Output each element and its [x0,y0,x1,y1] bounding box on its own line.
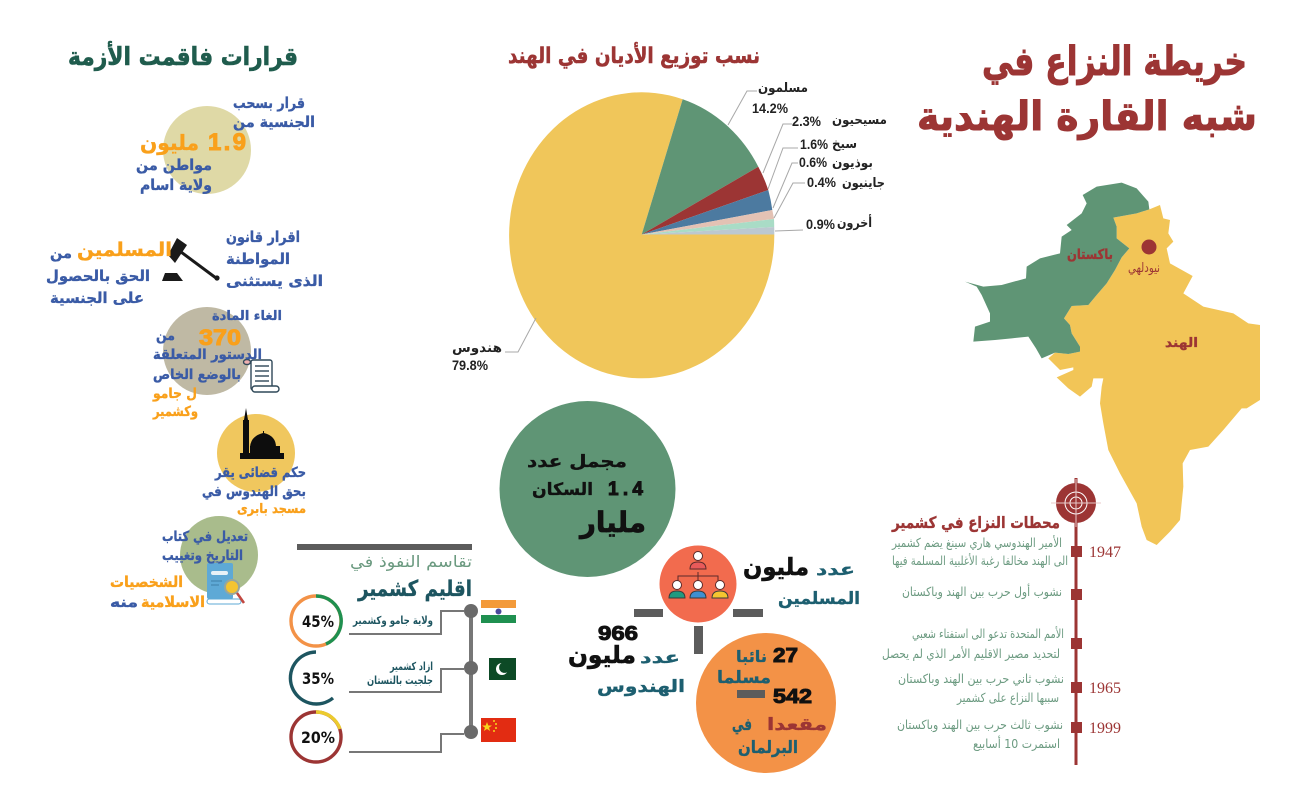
parliament circle: البرلمان [738,738,798,758]
item: article 370: 370 [199,325,241,350]
icon: organisation hierarchy [660,546,736,622]
label: Jammu and Kashmir: ولاية جامو وكشمير [352,614,433,627]
population circle: السكان [532,480,593,500]
panel: decisions that worsened the crisis [46,41,323,611]
heading: قرارات فاقمت الأزمة [68,41,298,72]
ring: 45% [291,596,341,646]
milestone: 1999 war: 1999 [1089,720,1121,737]
slice: Buddhists [642,210,774,234]
flag: China [481,718,516,742]
item: history textbook: منه [110,593,138,611]
item: history textbook: تعديل في كتاب [162,529,248,545]
item: citizenship withdrawal: الجنسية من [233,113,315,131]
heading: اقليم كشمير [357,577,472,602]
stat: Muslims count: المسلمين [778,589,860,609]
item: citizenship withdrawal: ولاية اسام [140,176,212,194]
slice: Others [642,227,774,234]
pie labels [452,81,887,373]
item: article 370: ل جامو [152,386,197,402]
milestone: UN plebiscite [882,626,1082,662]
pie labels: 1.6% [800,136,828,152]
item: history textbook: الاسلامية [141,593,205,611]
heading: تقاسم النفوذ في [350,552,472,572]
ring: 35% [290,652,334,704]
stat: Hindus count: الهندوس [597,677,685,697]
item: citizenship law: الحق بالحصول [46,267,150,285]
item: citizenship withdrawal: قرار بسحب [233,94,305,112]
milestone: 1965 war: سببها النزاع على كشمير [956,690,1059,706]
parliament circle [696,633,836,773]
milestone: 1965 war: نشوب ثاني حرب بين الهند وباكستان [898,671,1064,687]
stat: Hindus count [568,623,685,697]
item: citizenship law: اقرار قانون [226,228,300,246]
title [917,39,1257,140]
item: article 370: الدستور المتعلقة [153,347,262,363]
panel: division of influence in Kashmir [290,544,516,762]
milestone: 1999 war: استمرت 10 أسابيع [973,735,1060,752]
label: New Delhi: نيودلهي [1128,261,1160,276]
parliament circle: نائبا [736,647,767,666]
timeline heading: محطات النزاع في كشمير [891,513,1060,533]
pie labels: بوذيون [832,156,873,171]
timeline: Kashmir conflict milestones [882,478,1121,765]
heading [350,552,472,602]
item: article 370: من [156,328,175,344]
pie labels: 0.9% [806,216,835,232]
item: citizenship withdrawal [136,94,315,194]
New Delhi marker [1142,240,1156,254]
item: citizenship withdrawal: 1.9 [208,129,246,156]
slice: Jains [642,219,774,234]
pie labels: هندوس [452,341,502,356]
connector nodes [464,604,478,739]
item: article 370 [152,307,282,420]
item: citizenship withdrawal: مليون [140,131,199,155]
parliament circle: في [732,715,752,735]
milestone: 1947 accession: الى الهند مخالفا رغبة الأغلبية المسلمة فيها [892,553,1068,569]
icon: target [1051,479,1101,527]
milestone: 1947 accession [891,535,1121,569]
item: Babri mosque ruling [202,408,306,517]
pie labels: 79.8% [452,357,488,373]
population circle [500,401,676,577]
icon: gavel [162,238,220,281]
slice: Christians [642,167,768,234]
item: citizenship law: الذى يستثنى [226,272,323,290]
milestone: first war: نشوب أول حرب بين الهند وباكستان [902,583,1062,600]
pie labels: أخرون [837,214,872,231]
label: Azad Kashmir and Gilgit-Baltistan [367,660,433,687]
stat: Hindus count: عدد [640,648,680,667]
milestone: 1947 accession: 1947 [1089,544,1121,561]
population circle: 1.4 [608,479,643,500]
title: شبه القارة الهندية [917,94,1257,140]
pie labels: جاينيون [842,176,885,191]
leader lines [505,91,805,352]
item: history textbook: التاريخ وتغييب [162,548,243,564]
pie labels: 14.2% [752,100,788,116]
milestone: 1965 war [898,671,1121,706]
pie chart heading: نسب توزيع الأديان في الهند [508,41,760,69]
icon: mosque [240,408,284,459]
item: citizenship law: من [50,244,72,262]
milestone: UN plebiscite: لتحديد مصير الاقليم الأمر الذي لم يحصل [882,646,1060,662]
stat: Muslims count [743,553,860,609]
milestone: 1947 accession: الأمير الهندوسي هاري سينغ يضم كشمير [891,535,1062,551]
label: Pakistan: باكستان [1067,247,1113,263]
icon: scroll [244,360,279,392]
slice: Sikhs [642,190,772,234]
milestone: 1965 war: 1965 [1089,680,1121,697]
label: Azad Kashmir and Gilgit-Baltistan: جلجيت بالتستان [367,674,433,687]
milestone: UN plebiscite: الأمم المتحدة تدعو الى استفتاء شعبي [912,626,1064,642]
flag: Pakistan [489,658,516,680]
ring: 35%: 35% [302,669,334,688]
item: citizenship law [46,228,323,307]
item: Babri mosque ruling: مسجد بابرى [237,502,306,517]
connectors [349,611,471,752]
item: article 370: بالوضع الخاص [153,367,241,383]
ring: 20% [291,712,341,762]
connector bars [634,609,763,654]
label: Azad Kashmir and Gilgit-Baltistan: ازاد كشمير [389,660,433,673]
pie labels: سيخ [832,137,857,152]
stat: Muslims count: مليون [743,553,809,581]
pie labels: مسلمون [758,81,808,96]
item: article 370: وكشمير [152,404,198,420]
parliament circle: مسلما [717,668,771,688]
item: citizenship law: على الجنسية [50,289,144,307]
parliament circle: 27 [773,645,798,667]
item: article 370: الغاء المادة [212,309,282,324]
milestone: 1999 war [897,717,1121,752]
stat: Hindus count: مليون [568,641,636,669]
map: Pakistan and India [965,183,1260,545]
stat: Hindus count: 966 [598,623,638,645]
pie labels: مسيحيون [832,113,887,128]
pie chart: religions in India [452,81,887,378]
India shape [1048,205,1260,545]
item: citizenship law: المواطنة [226,250,290,268]
ring: 45%: 45% [302,612,334,631]
parliament circle: مقعدا [767,715,827,735]
item: citizenship withdrawal: مواطن من [136,156,212,174]
icon: book and magnifier [207,563,244,604]
milestone: 1999 war: نشوب ثالث حرب بين الهند وباكستان [897,717,1063,733]
label: India: الهند [1165,336,1198,351]
population circle: مليار [578,506,646,539]
item: Babri mosque ruling: بحق الهندوس في [202,484,306,500]
slice: Hindus [509,92,774,378]
item: Babri mosque ruling: حكم قضائى يقر [214,465,306,481]
pie labels: 2.3% [792,113,821,129]
item: history textbook: الشخصيات [110,573,183,591]
pie labels: 0.6% [799,154,827,170]
stat: Muslims count: عدد [816,560,855,579]
flag: India [481,600,516,623]
slice: Muslims [642,99,758,234]
ring: 20%: 20% [301,728,335,747]
Pakistan shape [965,183,1149,358]
pie labels: 0.4% [807,174,836,190]
population circle: مجمل عدد [527,452,627,472]
item: history textbook [110,516,258,611]
item: citizenship law: المسلمين [77,239,172,261]
parliament circle: 542 [773,686,812,708]
